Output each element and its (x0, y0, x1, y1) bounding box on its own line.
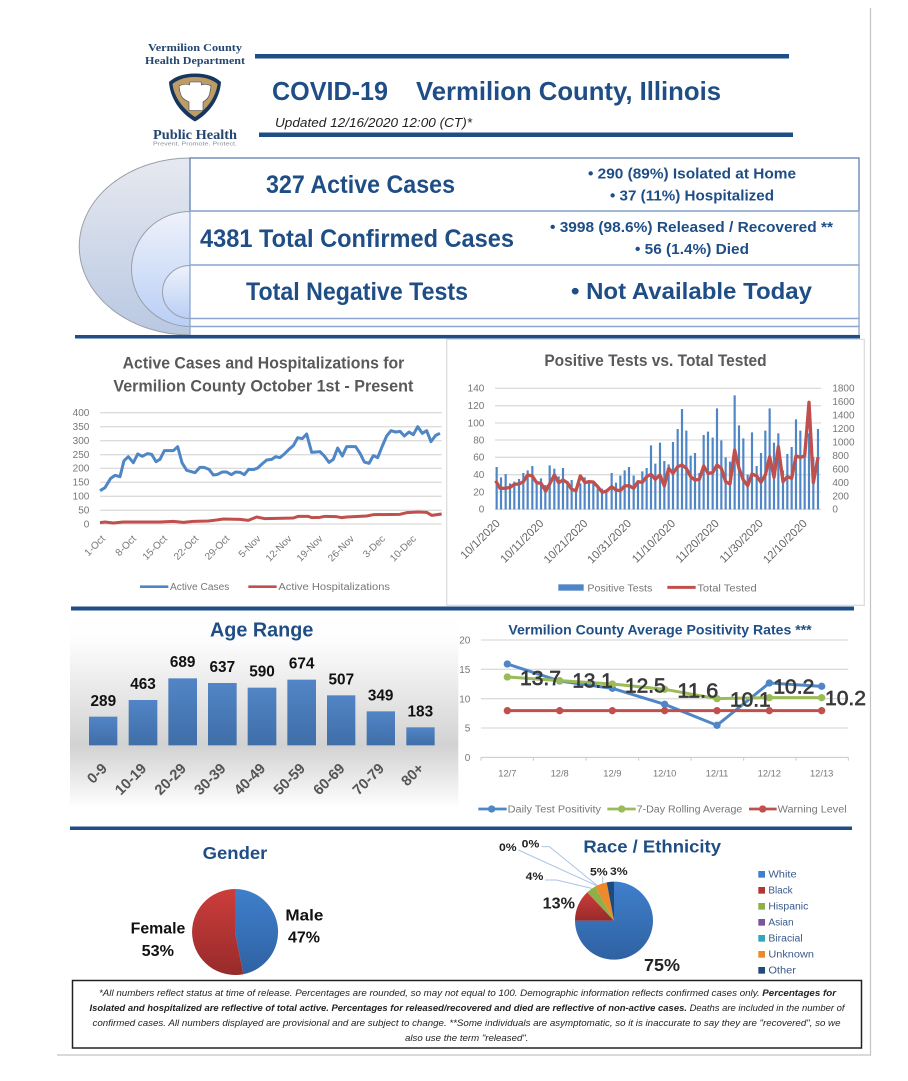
legend: Total Tested (697, 583, 757, 594)
category labels: 0-9 (85, 761, 111, 787)
logo: Vermilion County Health Department: Public Health (153, 127, 238, 142)
header rule top (255, 54, 789, 58)
y axis labels: 150 (73, 478, 90, 489)
title: Vermilion County, Illinois (416, 76, 721, 106)
y axis labels: 10 (459, 694, 471, 705)
line: 7-day rolling average (504, 673, 825, 702)
legend: Active Cases (170, 582, 229, 593)
x axis labels: 11/20/2020 (674, 518, 722, 566)
data labels: 13.7 (520, 667, 561, 690)
legend: Warning Level (778, 804, 847, 815)
data labels: 507 (329, 671, 354, 688)
x axis labels: 12/9 (603, 768, 621, 778)
leader lines (518, 847, 603, 888)
x axis labels: 10/31/2020 (586, 518, 634, 566)
percentage labels: 0% (522, 839, 540, 851)
icon: shield with cross (169, 74, 221, 122)
y axis labels: 20 (459, 636, 471, 647)
summary rows (190, 158, 859, 336)
right axis labels: 800 (832, 451, 849, 462)
legend: 7-Day Rolling Average (637, 804, 743, 815)
row: active cases: • 290 (89%) Isolated at Home (588, 166, 796, 182)
legend: Unknown (768, 950, 814, 961)
percentage labels: 13% (543, 895, 575, 912)
data labels (91, 654, 433, 720)
chart: positive tests vs total tested (447, 339, 864, 605)
legend: Other (768, 966, 797, 977)
data labels: 674 (289, 655, 315, 672)
x axis labels: 11/10/2020 (630, 518, 678, 566)
percentage labels (499, 839, 680, 975)
data labels: 590 (249, 664, 275, 681)
labels: Male (285, 907, 324, 924)
left axis labels: 40 (473, 470, 485, 481)
x axis labels: 19-Nov (295, 534, 325, 564)
y axis labels: 400 (73, 408, 90, 419)
x axis labels: 10/1/2020 (459, 518, 503, 562)
left axis labels: 60 (473, 453, 485, 464)
line: active cases (100, 427, 440, 491)
y axis labels: 15 (459, 665, 471, 676)
category labels: 30-39 (192, 761, 229, 799)
y axis labels: 0 (465, 753, 471, 764)
category labels: 50-59 (271, 761, 309, 799)
legend (478, 804, 847, 815)
chart title: Active Cases and Hospitalizations for (123, 354, 405, 373)
row: negative tests: Total Negative Tests (246, 278, 468, 306)
category labels: 20-29 (152, 761, 190, 799)
footnote box (72, 980, 862, 1048)
logo: Vermilion County Health Department (145, 42, 245, 148)
x axis labels: 10-Dec (388, 534, 419, 564)
data labels: 12.5 (625, 674, 666, 697)
category labels: 80+ (399, 761, 427, 790)
right axis labels: 1800 (832, 384, 855, 395)
right axis labels: 600 (832, 464, 849, 475)
x axis labels: 11/30/2020 (718, 518, 766, 566)
data labels: 463 (130, 676, 156, 693)
right axis labels: 1400 (832, 411, 855, 422)
pie (192, 889, 278, 975)
chart: active cases and hospitalizations (73, 354, 442, 593)
footnote box: confirmed cases. All numbers displayed are provisional and are subject to change. **Some individuals are asymptomatic, so it is inaccurate to say they are "recovered", so we (92, 1018, 840, 1029)
x axis labels: 1-Oct (83, 534, 108, 559)
x axis labels: 12/13 (810, 768, 833, 778)
data labels: 10.2 (773, 675, 814, 698)
left axis labels: 80 (473, 435, 485, 446)
chart: gender (131, 843, 324, 975)
x axis labels: 12/11 (706, 768, 728, 778)
chart: race / ethnicity (499, 836, 814, 977)
chart: average positivity rates (459, 622, 866, 815)
row: active cases (266, 166, 796, 204)
x axis labels: 26-Nov (326, 534, 357, 564)
row: total confirmed: • 3998 (98.6%) Released / Recovered ** (550, 220, 833, 236)
x axis labels: 29-Oct (203, 534, 232, 563)
x axis labels: 15-Oct (141, 534, 170, 563)
line: warning level (504, 707, 825, 714)
row: negative tests: • Not Available Today (571, 278, 812, 304)
x axis labels: 12/10/2020 (761, 518, 810, 566)
row: active cases: • 37 (11%) Hospitalized (610, 188, 774, 204)
row: total confirmed (200, 220, 833, 258)
y axis labels (459, 636, 471, 764)
y axis labels: 100 (73, 492, 90, 503)
labels: Female (131, 921, 186, 938)
x axis labels: 12/12 (758, 768, 781, 778)
section rule 1 (75, 335, 860, 338)
bars (89, 678, 435, 745)
x axis labels: 12/7 (498, 768, 516, 778)
x axis labels: 12-Nov (264, 534, 294, 564)
data labels: 289 (91, 693, 116, 710)
legend: White (768, 870, 797, 881)
left axis labels: 140 (468, 384, 485, 395)
x axis labels (498, 768, 833, 778)
chart title: Vermilion County Average Positivity Rates *** (508, 622, 812, 637)
category labels: 10-19 (112, 761, 150, 799)
chart title: Positive Tests vs. Total Tested (544, 351, 767, 370)
chart title: Age Range (210, 619, 313, 642)
category labels: 40-49 (231, 761, 269, 799)
data labels: 349 (368, 687, 393, 704)
pie (575, 882, 653, 960)
category labels (85, 761, 427, 799)
legend: Active Hospitalizations (278, 582, 390, 593)
data labels: 10.1 (730, 689, 771, 712)
data labels: 13.1 (572, 670, 613, 693)
data labels: 689 (170, 654, 195, 671)
left axis labels: 100 (468, 418, 485, 429)
right axis labels: 400 (832, 478, 849, 489)
chart: age range (70, 613, 458, 808)
y axis labels: 350 (73, 422, 90, 433)
updated timestamp: Updated 12/16/2020 12:00 (CT)* (275, 116, 473, 130)
percentage labels: 75% (644, 955, 680, 975)
labels: 53% (142, 943, 174, 960)
x axis labels: 10/11/2020 (498, 518, 546, 566)
y axis labels: 50 (78, 506, 90, 517)
legend (558, 583, 757, 594)
legend: Black (768, 886, 793, 897)
footnote box: *All numbers reflect status at time of release. Percentages are rounded, so may not equal to 100. Demographic information reflects confirmed cases only. Percentages for (99, 988, 837, 999)
percentage labels: 3% (610, 866, 628, 878)
line: active hospitalizations (100, 512, 442, 523)
right axis labels: 1200 (832, 424, 855, 435)
chart title (113, 354, 414, 396)
footnote box: Isolated and hospitalized are reflective of total active. Percentages for released/recovered and died are reflective of non-active cases. Deaths are included in the number of (90, 1003, 846, 1014)
logo: Vermilion County Health Department: Vermilion County (148, 42, 243, 54)
legend: Asian (768, 918, 794, 929)
y axis labels: 200 (73, 464, 90, 475)
legend (140, 582, 390, 593)
data labels: 183 (408, 703, 433, 720)
legend (758, 870, 814, 977)
y axis labels: 5 (465, 724, 471, 735)
data labels (520, 667, 866, 712)
section rule 2 (71, 606, 854, 610)
right axis labels: 1600 (832, 397, 855, 408)
row: negative tests (246, 278, 812, 306)
percentage labels: 5% (590, 867, 608, 879)
legend: Hispanic (768, 902, 808, 913)
left axis labels: 20 (473, 487, 485, 498)
title: COVID-19 (272, 76, 388, 106)
row: active cases: 327 Active Cases (266, 171, 455, 199)
right axis labels: 1000 (832, 438, 855, 449)
legend: Biracial (768, 934, 803, 945)
chart title: Gender (203, 843, 268, 863)
chart title: Vermilion County October 1st - Present (113, 377, 414, 396)
right axis labels (832, 384, 855, 516)
left axis labels (468, 384, 485, 516)
legend: Positive Tests (587, 583, 652, 594)
y axis labels: 0 (84, 519, 90, 530)
y axis labels (73, 408, 90, 530)
x axis labels: 8-Oct (114, 534, 139, 559)
x axis labels (459, 518, 810, 566)
labels: 47% (288, 930, 320, 947)
left axis labels: 120 (468, 401, 485, 412)
data labels: 10.2 (825, 687, 866, 710)
section rule 3 (70, 826, 852, 830)
logo: Vermilion County Health Department: Health Department (145, 55, 245, 67)
category labels: 70-79 (350, 761, 388, 799)
footnote box: also use the term "released". (405, 1033, 528, 1044)
data labels: 637 (210, 659, 235, 676)
percentage labels: 0% (499, 842, 517, 854)
panel: case summary (79, 158, 859, 336)
x axis labels (83, 534, 419, 564)
category labels: 60-69 (311, 761, 348, 799)
left axis labels: 0 (479, 505, 485, 516)
data labels: 11.6 (677, 680, 718, 703)
y axis labels: 300 (73, 436, 90, 447)
logo: Vermilion County Health Department: Prevent. Promote. Protect. (153, 142, 238, 148)
title (272, 76, 721, 106)
labels (131, 907, 324, 960)
right axis labels: 200 (832, 491, 849, 502)
x axis labels: 10/21/2020 (542, 518, 590, 566)
y axis labels: 250 (73, 450, 90, 461)
row: total confirmed: • 56 (1.4%) Died (635, 242, 749, 258)
nested arcs (79, 158, 190, 335)
x axis labels: 22-Oct (172, 534, 201, 563)
right axis labels: 0 (832, 505, 838, 516)
header rule bottom (259, 132, 793, 137)
chart title: Race / Ethnicity (583, 836, 721, 856)
line: daily test positivity (504, 660, 825, 729)
x axis labels: 12/10 (653, 768, 676, 778)
legend: Daily Test Positivity (508, 804, 601, 815)
bars: positive tests (497, 395, 818, 509)
line: total tested (496, 402, 818, 492)
percentage labels: 4% (526, 871, 544, 883)
x axis labels: 12/8 (551, 768, 569, 778)
x axis labels: 3-Dec (361, 534, 388, 560)
x axis labels: 5-Nov (237, 534, 263, 560)
row: total confirmed: 4381 Total Confirmed Cases (200, 225, 514, 253)
